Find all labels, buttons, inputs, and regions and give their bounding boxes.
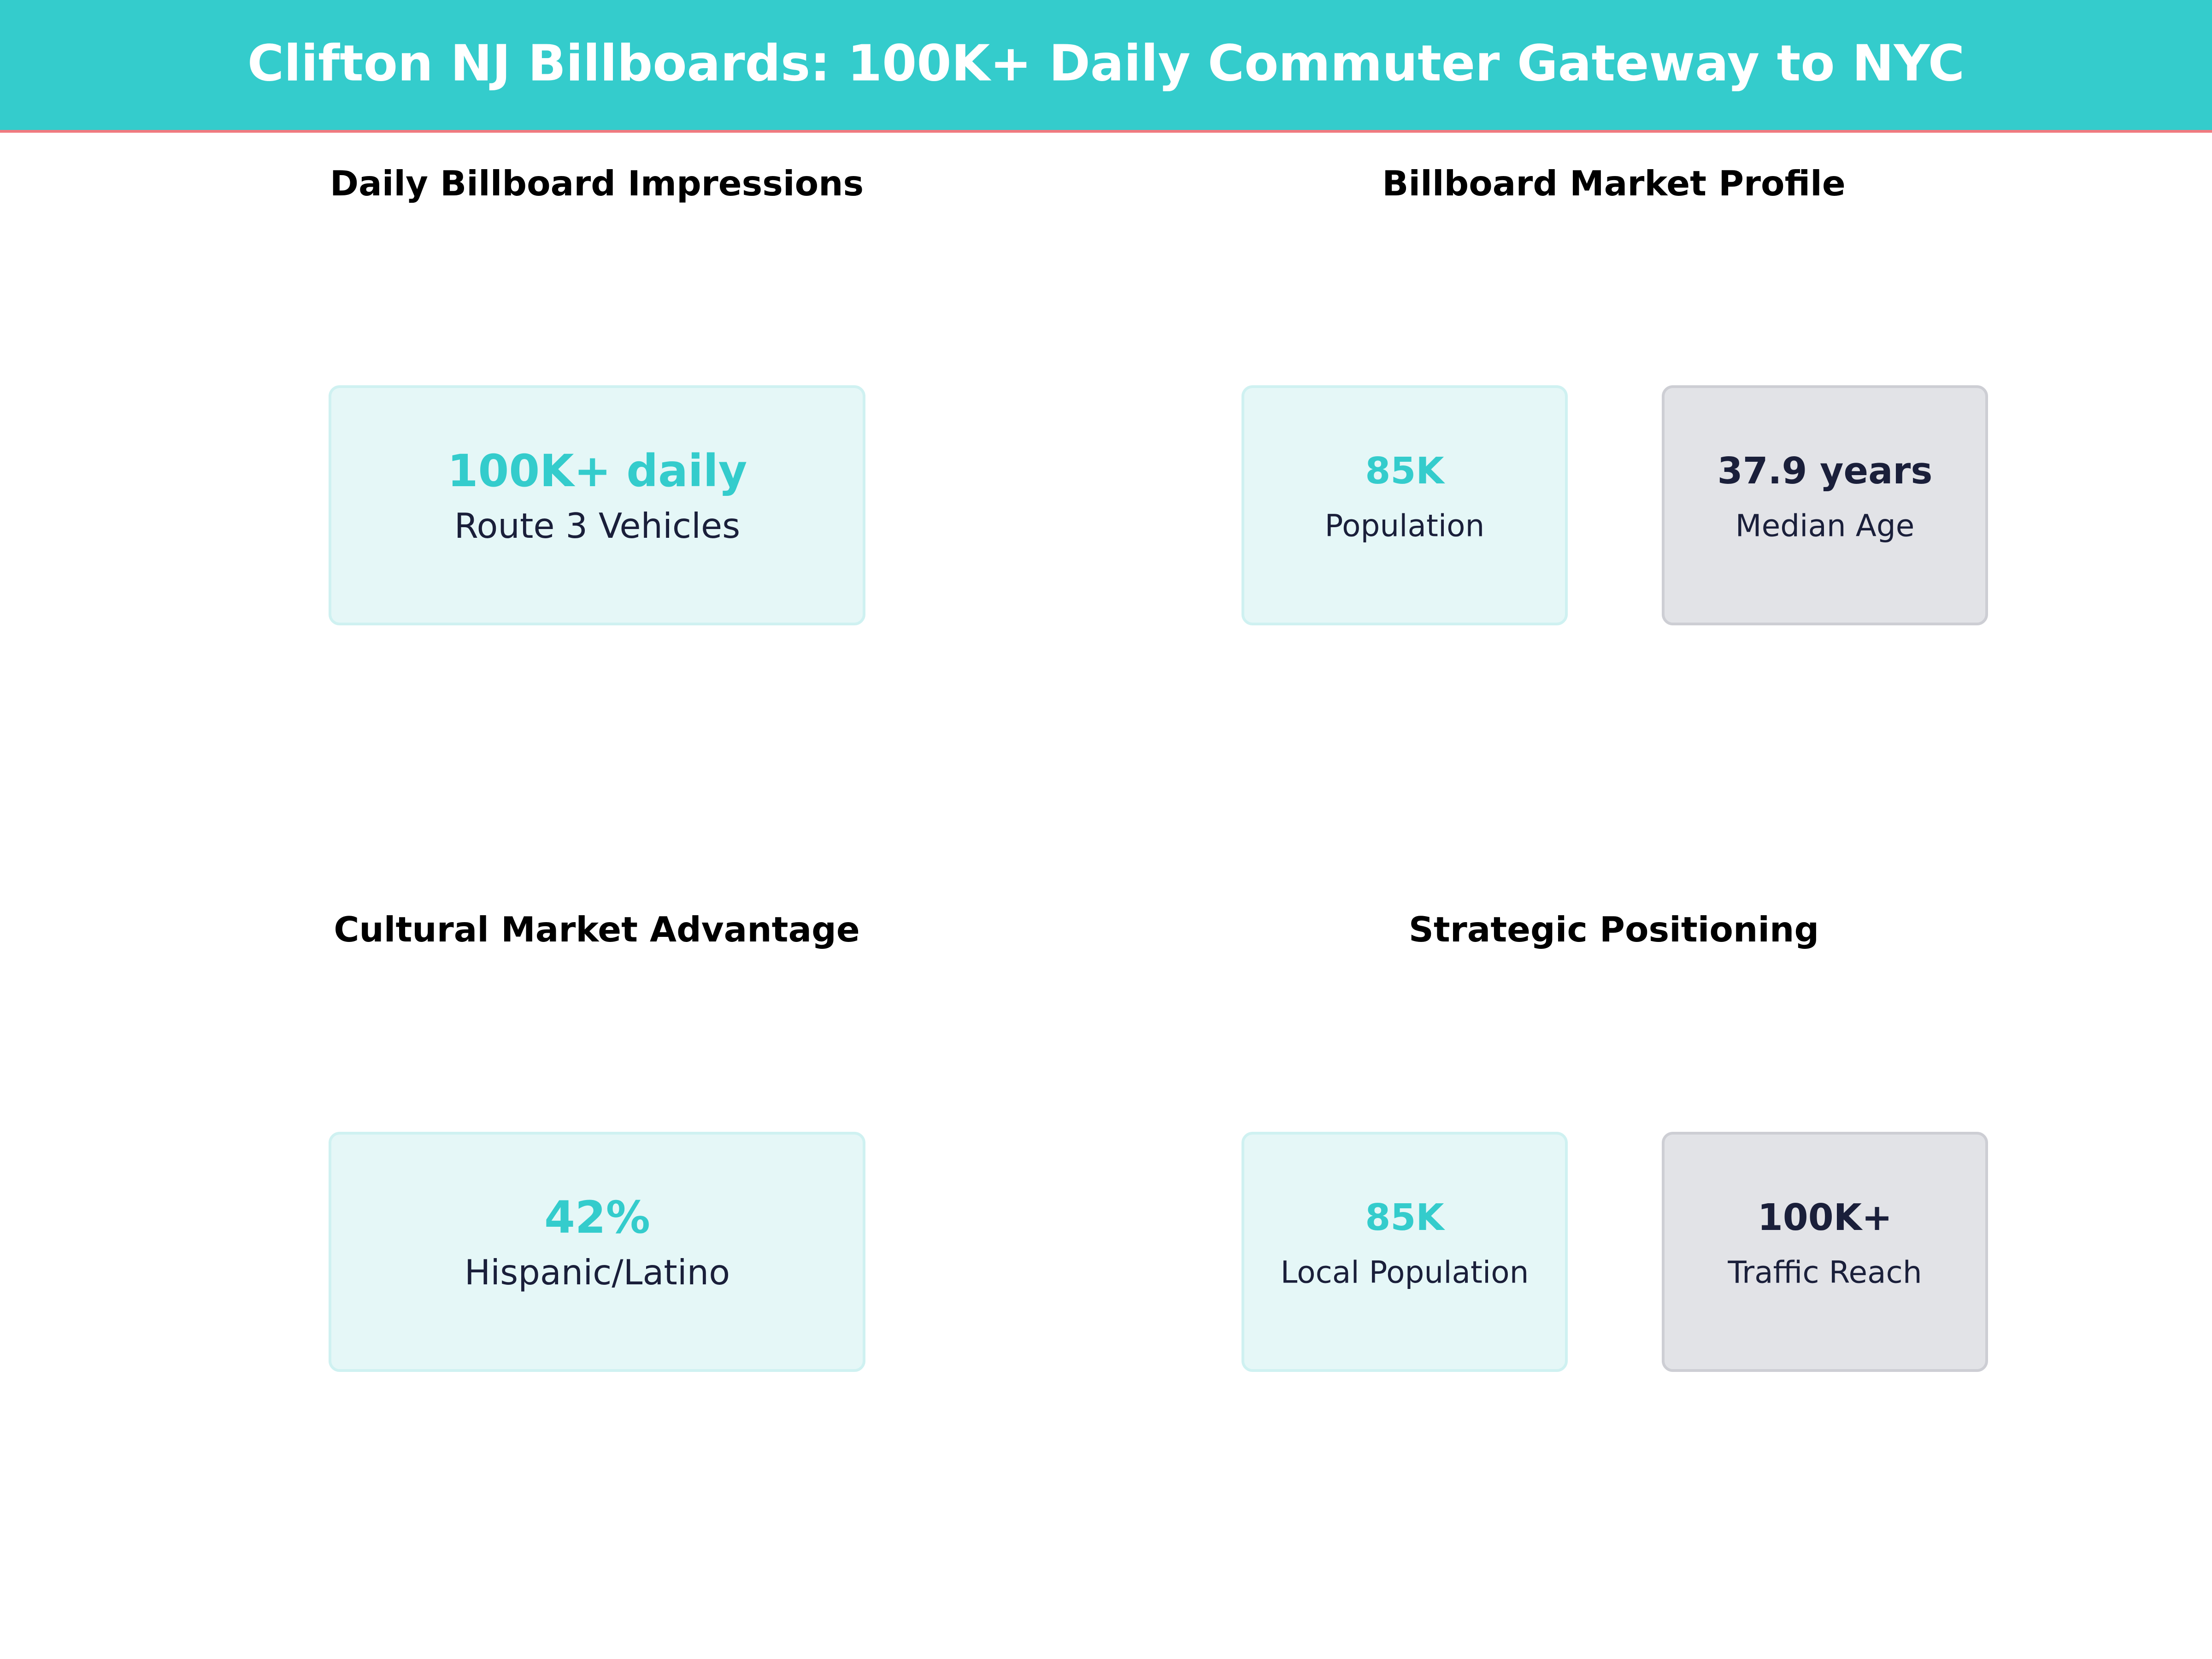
stat: 100K+: 100K+ [1758,1196,1892,1239]
card: median age [1662,385,1988,625]
heading: Cultural Market Advantage: Cultural Market Advantage [334,909,860,950]
card: traffic reach [1662,1132,1988,1372]
card: local population [1241,1132,1568,1372]
stat: 85K: 85K [1365,1196,1444,1239]
label: Traffic Reach: Traffic Reach [1728,1254,1922,1290]
heading: Daily Billboard Impressions: Daily Billboard Impressions [330,163,864,204]
label: Local Population: Local Population [1281,1254,1529,1290]
heading: Billboard Market Profile: Billboard Market Profile [1382,163,1846,204]
panel: cultural card [329,1132,865,1372]
header banner [0,0,2212,133]
label: Route 3 Vehicles: Route 3 Vehicles [454,506,740,546]
stat: 42%: 42% [544,1192,650,1243]
heading: Strategic Positioning: Strategic Positioning [1409,909,1819,950]
label: Hispanic/Latino: Hispanic/Latino [465,1252,730,1293]
label: Population: Population [1325,508,1484,544]
stat: 85K: 85K [1365,450,1444,492]
panel: impressions card [329,385,865,625]
card: population [1241,385,1568,625]
stat: 100K+ daily: 100K+ daily [447,445,747,497]
stat: 37.9 years: 37.9 years [1718,450,1932,492]
label: Median Age: Median Age [1735,508,1914,544]
title: Clifton NJ Billboards: 100K+ Daily Commuter Gateway to NYC [247,35,1965,92]
